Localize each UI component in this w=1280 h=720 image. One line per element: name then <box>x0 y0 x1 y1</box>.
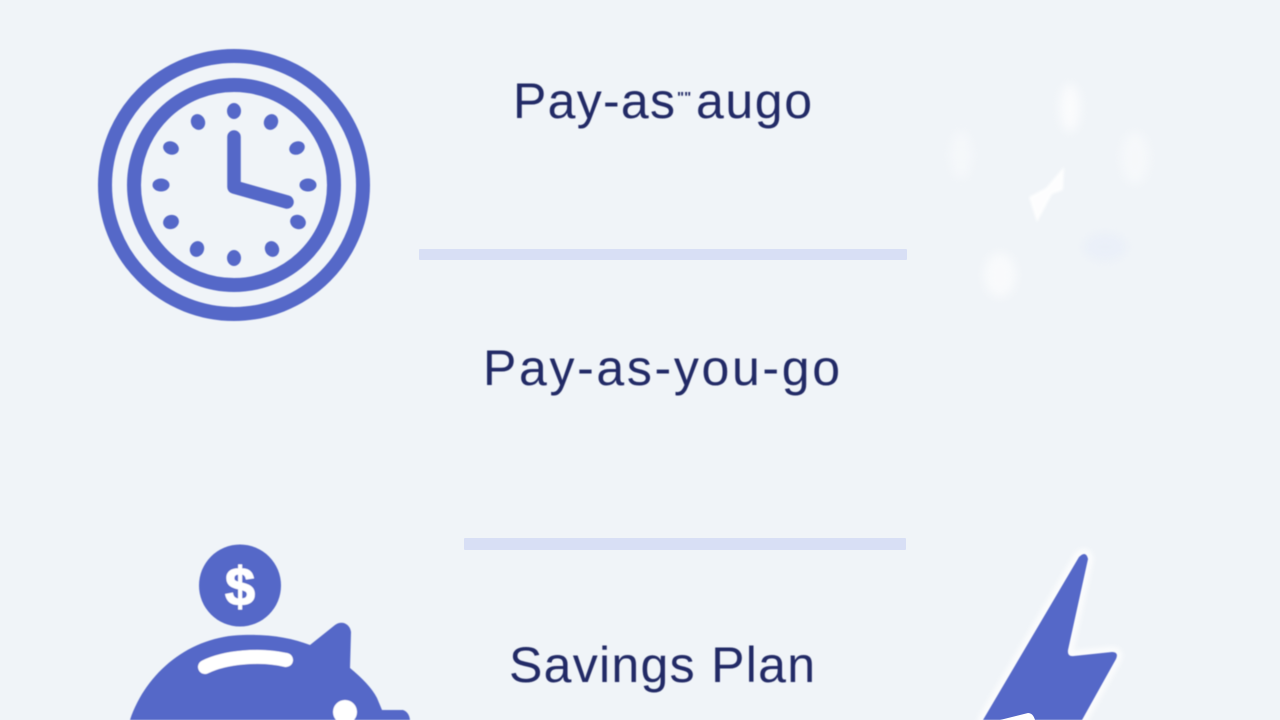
icon: lightning bolt <box>983 554 1117 720</box>
icon: dollar coin <box>199 544 281 626</box>
icon: piggy bank <box>130 623 410 720</box>
heading: savings plan: Savings Plan <box>509 637 815 693</box>
heading: garbled pay-as-you-go <box>513 73 812 129</box>
heading: pay-as-you-go: Pay-as-you-go <box>483 340 840 396</box>
heading: garbled pay-as-you-go: "" <box>677 89 691 106</box>
faint white bolt sparkles <box>950 84 1149 297</box>
icon: clock <box>105 56 363 314</box>
divider: lower <box>464 538 906 550</box>
divider: upper <box>419 249 907 260</box>
icon: dollar coin: $ <box>225 557 255 617</box>
heading: garbled pay-as-you-go: augo <box>696 73 812 129</box>
heading: garbled pay-as-you-go: Pay-as <box>513 73 675 129</box>
